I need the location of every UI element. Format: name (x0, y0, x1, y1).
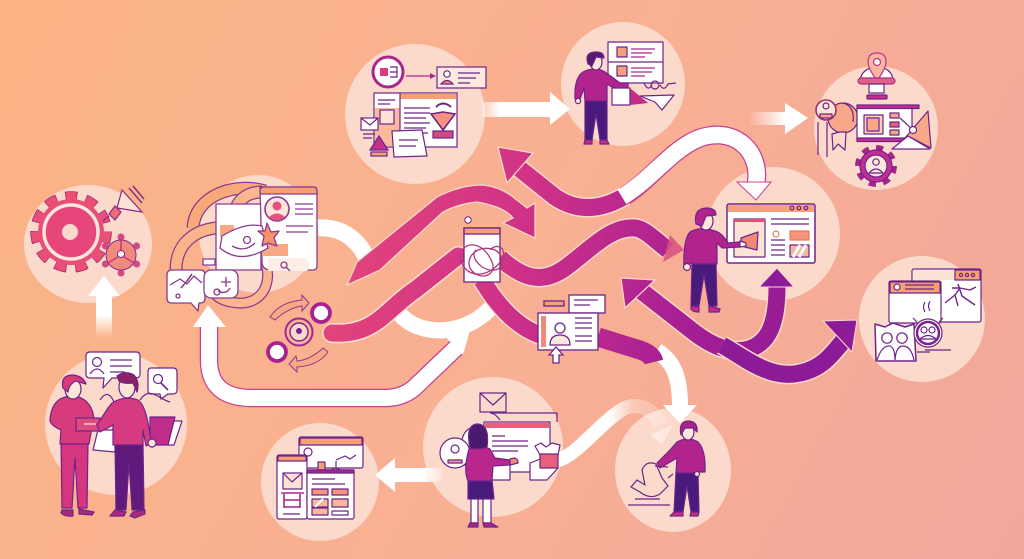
panel: top document and megaphone (361, 57, 486, 157)
arrow: white up arrow from team to gear (88, 276, 120, 339)
doodles (630, 81, 676, 110)
panel: lower right courier (628, 421, 705, 516)
panel: central tangled document (460, 217, 504, 282)
profile card (260, 187, 317, 270)
figure (657, 421, 705, 516)
doodles (628, 463, 673, 505)
small sheet (612, 88, 630, 105)
envelope top (480, 393, 506, 412)
rotate arrows (270, 295, 309, 320)
profile bubble (440, 427, 478, 468)
panel: top person with lists (575, 42, 676, 144)
panel: team conversation (50, 352, 182, 518)
web window (727, 204, 815, 263)
icon: large gear (35, 196, 107, 268)
lower node (268, 343, 286, 361)
arrow: fading white wave from woman to courier (548, 406, 673, 462)
panel: woman with mail (440, 393, 560, 527)
connector (406, 73, 436, 79)
upper node (312, 304, 330, 322)
speech bubble: magnifier (148, 368, 177, 399)
gear (858, 148, 894, 184)
note (392, 130, 427, 157)
panel: lower profile box with cursor (538, 295, 605, 363)
left column (277, 455, 307, 519)
arrow: centre to lower box and on to lower person (482, 280, 697, 423)
arrow: pink upper arrow into centre (347, 185, 535, 285)
speech bubble: profile (86, 352, 140, 388)
funnel (431, 112, 455, 138)
plus card (203, 259, 238, 298)
right section (307, 470, 354, 519)
megaphone badge (373, 57, 403, 87)
panel: bottom left windows (277, 437, 363, 519)
icon: small gear (102, 234, 140, 276)
arrow: pink lower arrow from hub to centre (332, 256, 458, 333)
knobs (318, 462, 342, 472)
main window (374, 93, 457, 147)
arrow: white loop behind cluster and centre (318, 228, 494, 330)
figure (575, 52, 628, 144)
arrow: long white return arrow (193, 305, 470, 398)
documents behind team (93, 393, 182, 452)
icon: funnel (103, 186, 144, 221)
front window (889, 281, 941, 323)
centre node (286, 318, 312, 346)
envelope right (530, 443, 560, 480)
figure: right man (97, 373, 156, 518)
hub: rotating nodes (268, 295, 330, 372)
location pin on monitor (858, 53, 895, 99)
badge (913, 318, 951, 352)
back window (912, 269, 981, 322)
chart bubble card (167, 270, 205, 311)
arrow: top right white arrow (748, 103, 808, 134)
leaf badge (220, 223, 279, 256)
arrow: top white arrow (482, 92, 570, 125)
arrow: bottom left white arrow (375, 458, 442, 492)
arrow: middle wave to presenter (500, 228, 684, 277)
cursor (549, 347, 563, 363)
window (484, 422, 550, 472)
panel: tangled ring cluster (167, 187, 317, 311)
people card (875, 323, 916, 361)
envelope (892, 111, 931, 149)
panel: presenter (684, 204, 815, 312)
profile badge (816, 100, 858, 157)
envelope (361, 118, 378, 138)
search tray (268, 258, 309, 271)
window (857, 105, 919, 142)
back document (216, 204, 261, 270)
figure (684, 208, 746, 312)
figure: left man (50, 375, 100, 516)
profile tag (437, 67, 486, 88)
figure (466, 424, 518, 527)
panel: top right cluster (816, 53, 931, 184)
triangle marker (370, 136, 388, 156)
panel: right cluster (875, 269, 981, 361)
arrow: upper left pointing branch turning white (498, 135, 771, 208)
back window (490, 413, 557, 422)
rings (176, 188, 268, 303)
arrow: purple arrows at right (621, 268, 857, 374)
small box (490, 464, 510, 480)
scribble (460, 245, 504, 276)
back window (299, 437, 363, 468)
panel: gear (35, 186, 144, 276)
list window (608, 42, 663, 83)
